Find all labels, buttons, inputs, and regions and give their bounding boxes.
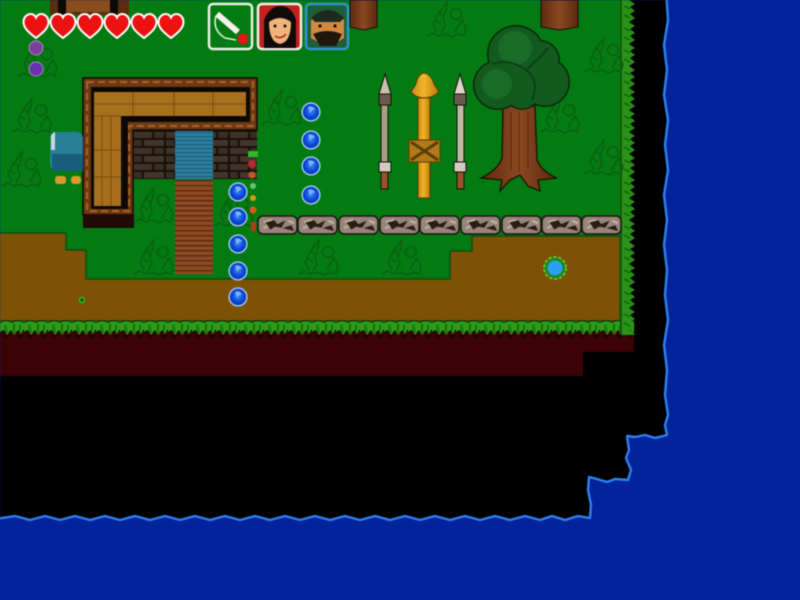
golden centre pillar (409, 73, 440, 198)
top-left wooden structure (50, 0, 129, 15)
woman portrait card (258, 4, 301, 49)
small collectible items (248, 151, 258, 231)
stone wall (258, 216, 621, 234)
health hearts (24, 14, 184, 38)
purple gems (29, 41, 43, 76)
man portrait card (306, 4, 348, 49)
blue stairs (175, 131, 213, 179)
top tree trunks (350, 0, 578, 30)
grass field (0, 0, 622, 322)
small green marker (80, 298, 84, 302)
dirt path (0, 233, 620, 325)
right spear (454, 74, 466, 189)
wooden stairs (175, 180, 213, 274)
blue orbs left column (228, 182, 248, 307)
right grass fringe (619, 0, 635, 335)
foliage outlines (2, 2, 623, 275)
brick wall (133, 130, 257, 179)
bottom grass fringe (0, 320, 634, 338)
weapon slot card (209, 4, 252, 49)
dark red soil (0, 332, 634, 376)
teal figure (50, 132, 83, 184)
blue orbs right column (301, 102, 321, 205)
left spear (379, 74, 391, 189)
black island with jagged blue shoreline (0, 0, 668, 520)
L-shaped wooden building (83, 78, 257, 228)
large tree (473, 25, 570, 191)
water shard pickup (544, 257, 566, 279)
